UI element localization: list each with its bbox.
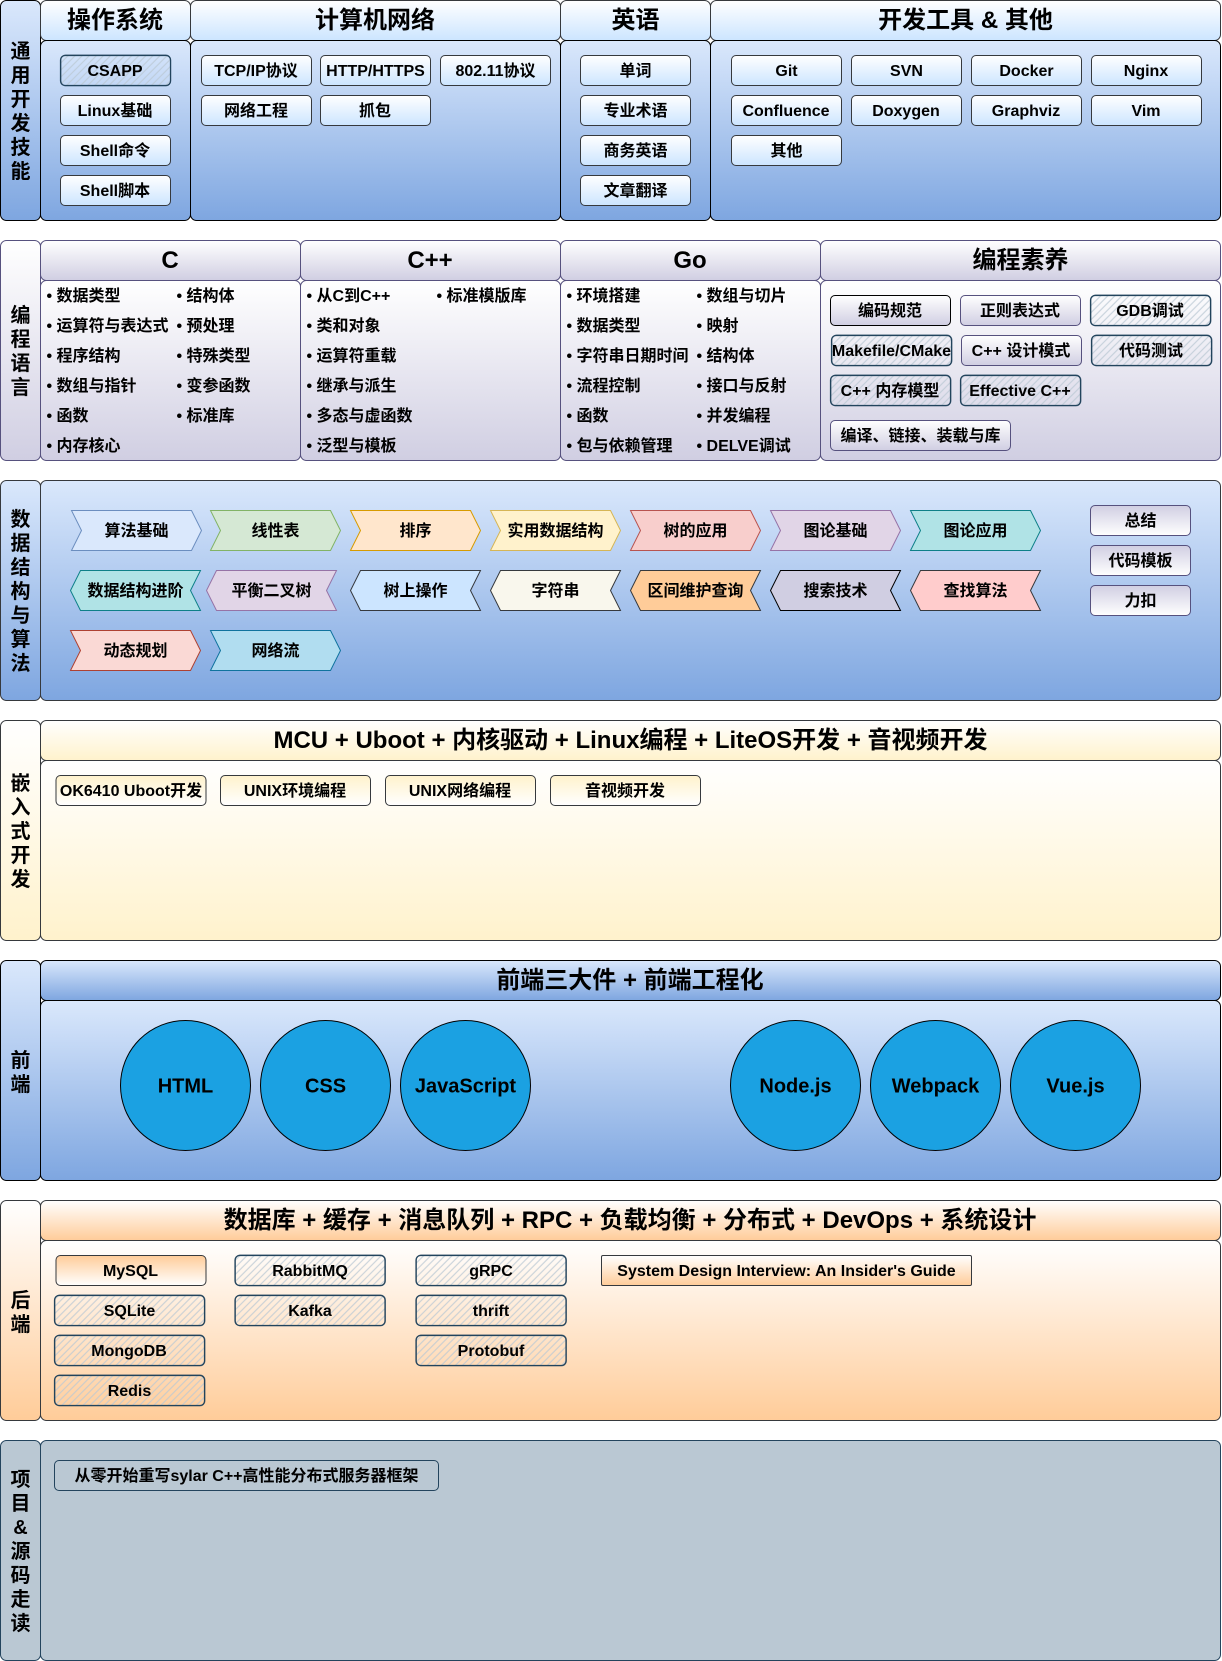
sidebar label: 数据结构与算法: 据 xyxy=(10,532,30,555)
button: Graphviz: Graphviz xyxy=(992,103,1060,120)
step: 图论应用 xyxy=(910,510,1040,550)
sketch button: CSAPP xyxy=(60,55,171,86)
sidebar label: 编程语言 xyxy=(0,240,40,460)
sidebar label: 项目&源码走读: 读 xyxy=(10,1612,30,1635)
step: 平衡二叉树: 平衡二叉树 xyxy=(231,581,312,600)
topic list: C++: • 类和对象 xyxy=(306,316,381,335)
button: System Design Interview xyxy=(602,1256,972,1286)
heading: backend: 数据库 + 缓存 + 消息队列 + RPC + 负载均衡 + 分布式 + DevOps + 系统设计 xyxy=(224,1207,1036,1234)
button: 抓包: 抓包 xyxy=(359,101,391,120)
topic list: C: • 标准库 xyxy=(176,407,235,425)
button: OK6410 Uboot开发 xyxy=(56,776,206,806)
step: 搜索技术 xyxy=(770,570,900,610)
button: 音视频开发 xyxy=(550,776,700,806)
sidebar label: 数据结构与算法: 算 xyxy=(10,628,30,651)
sketch button: SQLite xyxy=(54,1295,205,1326)
button: 单词 xyxy=(580,56,690,86)
topic list: Go: • DELVE调试 xyxy=(696,437,791,455)
panel: 编程素养: 编程素养 xyxy=(972,247,1068,274)
sidebar label: 后端: 后 xyxy=(10,1289,30,1312)
sketch button: Effective C++: Effective C++ xyxy=(969,383,1071,400)
sketch button: Makefile/CMake: Makefile/CMake xyxy=(832,343,951,360)
sketch button: Makefile/CMake xyxy=(832,335,952,366)
topic list: Go: • 包与依赖管理 xyxy=(566,436,673,455)
sidebar label: 前端: 前 xyxy=(10,1049,30,1072)
panel: 开发工具 & 其他 xyxy=(710,0,1220,220)
button: HTTP/HTTPS xyxy=(320,56,430,86)
sidebar label: 嵌入式开发: 开 xyxy=(10,845,30,867)
button: UNIX环境编程: UNIX环境编程 xyxy=(244,781,346,800)
sketch button: GDB调试: GDB调试 xyxy=(1116,302,1184,320)
sketch button: Effective C++ xyxy=(960,375,1081,406)
sidebar label: 前端 xyxy=(0,960,40,1180)
button: 力扣 xyxy=(1090,586,1190,616)
topic list: C++: • 从C到C++ xyxy=(306,287,390,305)
button: OK6410 Uboot开发: OK6410 Uboot开发 xyxy=(60,781,202,800)
button: 音视频开发: 音视频开发 xyxy=(585,781,665,800)
button: HTTP/HTTPS: HTTP/HTTPS xyxy=(326,63,425,80)
button: 代码模板 xyxy=(1090,546,1190,576)
button: 编译、链接、装载与库: 编译、链接、装载与库 xyxy=(840,426,1001,445)
sidebar label: 数据结构与算法: 法 xyxy=(10,652,30,675)
step: 数据结构进阶: 数据结构进阶 xyxy=(87,581,184,600)
topic list: C: • 结构体 xyxy=(176,287,235,305)
step: 线性表 xyxy=(210,510,340,550)
panel: Go: Go xyxy=(673,247,707,274)
button: Graphviz xyxy=(972,96,1082,126)
sketch button: SQLite: SQLite xyxy=(104,1303,155,1320)
sketch button: Kafka xyxy=(235,1295,385,1326)
circle: Node.js: Node.js xyxy=(759,1076,832,1098)
sidebar label: 后端 xyxy=(0,1200,40,1420)
circle: Vue.js xyxy=(1010,1020,1140,1150)
topic list: C: • 变参函数 xyxy=(176,376,251,395)
panel: C++ xyxy=(300,240,560,460)
button: sylar framework: 从零开始重写sylar C++高性能分布式服务器框架 xyxy=(74,1466,419,1485)
button: TCP/IP协议 xyxy=(202,56,312,86)
button: TCP/IP协议: TCP/IP协议 xyxy=(214,62,298,80)
sidebar label: 数据结构与算法: 构 xyxy=(10,580,30,603)
button: MySQL: MySQL xyxy=(103,1263,158,1280)
panel: 项目 content xyxy=(40,1440,1220,1660)
sketch button: MongoDB: MongoDB xyxy=(91,1343,167,1360)
section: 数据结构与算法 xyxy=(0,480,1220,700)
panel: 计算机网络: 计算机网络 xyxy=(315,6,435,34)
step: 算法基础 xyxy=(72,510,202,550)
sidebar label: 数据结构与算法: 数 xyxy=(10,508,30,531)
sidebar label: 通用开发技能: 能 xyxy=(10,160,30,183)
button: 商务英语 xyxy=(580,136,690,166)
button: 专业术语 xyxy=(580,96,690,126)
button: 802.11协议: 802.11协议 xyxy=(455,62,536,80)
button: 代码模板: 代码模板 xyxy=(1108,552,1173,570)
step: 数据结构进阶 xyxy=(70,570,200,610)
button: 其他 xyxy=(732,136,842,166)
button: 编码规范: 编码规范 xyxy=(858,301,922,320)
step: 查找算法 xyxy=(910,570,1040,610)
sketch button: 代码测试 xyxy=(1092,335,1212,366)
step: 图论应用: 图论应用 xyxy=(943,521,1008,540)
button: 总结 xyxy=(1090,506,1190,536)
step: 实用数据结构 xyxy=(490,510,620,550)
section: 嵌入式开发 xyxy=(0,720,1220,940)
topic list: C++: • 泛型与模板 xyxy=(306,437,397,455)
topic list: Go: • 字符串日期时间 xyxy=(566,346,689,365)
panel: 计算机网络 xyxy=(190,0,560,220)
button: Docker: Docker xyxy=(999,63,1054,80)
button: 正则表达式 xyxy=(960,296,1080,326)
sketch button: gRPC: gRPC xyxy=(469,1263,513,1280)
topic list: C: • 数组与指针 xyxy=(46,377,137,395)
sidebar label: 项目&源码走读: 走 xyxy=(10,1588,30,1611)
topic list: C: • 数据类型 xyxy=(46,287,121,305)
button: 802.11协议 xyxy=(440,56,550,86)
topic list: Go: • 函数 xyxy=(566,407,609,425)
button: 编码规范 xyxy=(830,296,950,326)
topic list: Go: • 接口与反射 xyxy=(696,377,787,395)
sidebar label: 嵌入式开发 xyxy=(0,720,40,940)
step: 算法基础: 算法基础 xyxy=(104,521,169,540)
step: 平衡二叉树 xyxy=(206,570,336,610)
step: 区间维护查询 xyxy=(630,570,760,610)
panel: 操作系统 xyxy=(40,0,190,220)
section: 后端 xyxy=(0,1200,1220,1420)
sketch button: GDB调试 xyxy=(1090,295,1211,326)
step: 网络流 xyxy=(210,630,340,670)
step: 图论基础 xyxy=(770,510,900,550)
sidebar label: 嵌入式开发: 式 xyxy=(10,820,30,843)
button: SVN: SVN xyxy=(890,63,923,80)
topic list: C++: • 多态与虚函数 xyxy=(306,406,413,425)
panel: 前端 content xyxy=(40,960,1220,1180)
button: 抓包 xyxy=(320,96,430,126)
step: 图论基础: 图论基础 xyxy=(803,521,868,540)
panel: 嵌入式 content xyxy=(40,720,1220,940)
sidebar label: 编程语言: 语 xyxy=(10,352,30,375)
section: 前端 xyxy=(0,960,1220,1180)
sketch button: thrift: thrift xyxy=(473,1303,510,1320)
sketch button: RabbitMQ: RabbitMQ xyxy=(272,1263,348,1280)
button: Doxygen xyxy=(852,96,962,126)
topic list: Go: • 映射 xyxy=(696,317,739,335)
sidebar label: 通用开发技能 xyxy=(0,0,40,220)
step: 树上操作: 树上操作 xyxy=(383,581,448,600)
button: Vim xyxy=(1092,96,1202,126)
step: 实用数据结构: 实用数据结构 xyxy=(507,521,604,540)
topic list: C: • 预处理 xyxy=(176,317,235,335)
step: 排序: 排序 xyxy=(399,521,432,540)
step: 查找算法: 查找算法 xyxy=(943,581,1008,600)
sidebar label: 项目&源码走读 xyxy=(0,1440,40,1660)
sketch button: Protobuf xyxy=(416,1335,566,1366)
button: System Design Interview: System Design Interview: An Insider's Guide xyxy=(617,1263,956,1280)
button: UNIX环境编程 xyxy=(220,776,370,806)
sketch button: thrift xyxy=(416,1295,566,1326)
step: 动态规划 xyxy=(70,630,200,670)
sidebar label: 数据结构与算法 xyxy=(0,480,40,700)
topic list: C: • 内存核心 xyxy=(46,436,121,455)
topic list: C: • 特殊类型 xyxy=(176,346,251,365)
topic list: Go: • 数组与切片 xyxy=(696,287,787,305)
button: Linux基础: Linux基础 xyxy=(78,102,152,120)
panel: C xyxy=(40,240,300,460)
sidebar label: 通用开发技能: 通 xyxy=(10,40,30,63)
sketch button: CSAPP: CSAPP xyxy=(87,63,143,80)
panel: C: C xyxy=(161,247,179,274)
sketch button: Protobuf: Protobuf xyxy=(458,1343,525,1360)
sidebar label: 嵌入式开发: 嵌 xyxy=(10,772,30,795)
heading: embedded stack: MCU + Uboot + 内核驱动 + Linux编程 + LiteOS开发 + 音视频开发 xyxy=(273,727,988,754)
circle: HTML: HTML xyxy=(158,1076,213,1098)
sidebar label: 通用开发技能: 发 xyxy=(10,112,30,135)
sketch button: RabbitMQ xyxy=(235,1255,385,1286)
circle: CSS xyxy=(260,1020,390,1150)
topic list: Go: • 结构体 xyxy=(696,347,755,365)
panel: 后端 content xyxy=(40,1200,1220,1420)
sidebar label: 项目&源码走读: 码 xyxy=(10,1564,30,1587)
topic list: C: • 运算符与表达式 xyxy=(46,316,169,335)
button: MySQL xyxy=(56,1256,206,1286)
button: 专业术语: 专业术语 xyxy=(603,102,668,120)
button: C++ 设计模式 xyxy=(962,336,1082,366)
step: 网络流: 网络流 xyxy=(251,641,300,660)
section: 项目&源码走读 xyxy=(0,1440,1220,1660)
button: Shell脚本: Shell脚本 xyxy=(80,182,150,200)
sidebar label: 前端: 端 xyxy=(10,1073,30,1096)
button: UNIX网络编程 xyxy=(386,776,536,806)
button: 商务英语: 商务英语 xyxy=(603,141,668,160)
sidebar label: 项目&源码走读: 源 xyxy=(10,1540,30,1563)
button: Linux基础 xyxy=(60,96,170,126)
button: Shell命令: Shell命令 xyxy=(80,141,150,160)
sketch button: Redis xyxy=(54,1375,205,1406)
button: 网络工程 xyxy=(202,96,312,126)
circle: JavaScript: JavaScript xyxy=(415,1076,516,1098)
sidebar label: 后端: 端 xyxy=(10,1313,30,1336)
sidebar label: 通用开发技能: 开 xyxy=(10,89,30,111)
sketch button: C++ 内存模型: C++ 内存模型 xyxy=(841,382,939,400)
sidebar label: 数据结构与算法: 结 xyxy=(10,556,30,579)
button: 文章翻译 xyxy=(580,176,690,206)
step: 字符串: 字符串 xyxy=(531,581,580,600)
circle: Node.js xyxy=(730,1020,860,1150)
section: 通用开发技能 xyxy=(0,0,1220,220)
sidebar label: 嵌入式开发: 入 xyxy=(10,796,30,819)
topic list: Go: • 数据类型 xyxy=(566,317,641,335)
button: 编译、链接、装载与库 xyxy=(830,420,1010,450)
step: 动态规划: 动态规划 xyxy=(103,641,168,660)
sidebar label: 数据结构与算法: 与 xyxy=(10,604,30,627)
circle: Vue.js: Vue.js xyxy=(1046,1076,1105,1098)
circle: HTML xyxy=(120,1020,250,1150)
sidebar label: 编程语言: 编 xyxy=(10,303,30,327)
sketch button: gRPC xyxy=(416,1255,566,1286)
panel: 开发工具 & 其他: 开发工具 & 其他 xyxy=(878,7,1053,34)
sidebar label: 项目&源码走读: & xyxy=(13,1517,28,1539)
button: Docker xyxy=(972,56,1082,86)
button: 总结: 总结 xyxy=(1124,511,1157,530)
sidebar label: 通用开发技能: 用 xyxy=(10,65,30,87)
step: 字符串 xyxy=(490,570,620,610)
sketch button: MongoDB xyxy=(54,1335,205,1366)
topic list: Go xyxy=(566,286,791,455)
step: 树的应用 xyxy=(630,510,760,550)
panel: C++: C++ xyxy=(407,247,453,274)
topic list: C++: • 标准模版库 xyxy=(436,287,527,305)
button: Doxygen: Doxygen xyxy=(872,103,940,120)
step: 线性表: 线性表 xyxy=(251,521,300,540)
button: Shell命令 xyxy=(60,136,170,166)
button: Nginx: Nginx xyxy=(1124,63,1168,80)
panel: 英语 xyxy=(560,0,710,220)
step: 树的应用: 树的应用 xyxy=(663,521,728,540)
step: 搜索技术: 搜索技术 xyxy=(803,581,868,600)
sidebar label: 编程语言: 言 xyxy=(10,376,30,399)
topic list: C xyxy=(46,287,251,455)
step: 树上操作 xyxy=(350,570,480,610)
step: 区间维护查询: 区间维护查询 xyxy=(647,581,744,600)
sidebar label: 项目&源码走读: 项 xyxy=(10,1469,30,1491)
panel: Go xyxy=(560,240,820,460)
button: Shell脚本 xyxy=(60,176,170,206)
button: 文章翻译: 文章翻译 xyxy=(603,181,668,200)
sketch button: Kafka: Kafka xyxy=(288,1303,332,1320)
button: 正则表达式: 正则表达式 xyxy=(980,302,1060,320)
button: Confluence: Confluence xyxy=(742,103,830,120)
topic list: Go: • 流程控制 xyxy=(566,376,641,395)
button: Git xyxy=(732,56,842,86)
button: C++ 设计模式: C++ 设计模式 xyxy=(972,342,1070,360)
sidebar label: 编程语言: 程 xyxy=(10,328,30,351)
button: SVN xyxy=(852,56,962,86)
section: 编程语言 xyxy=(0,240,1220,460)
button: 单词: 单词 xyxy=(619,62,652,80)
sketch button: Redis: Redis xyxy=(108,1383,151,1400)
circle: JavaScript xyxy=(400,1020,530,1150)
topic list: Go: • 并发编程 xyxy=(696,406,771,425)
button: UNIX网络编程: UNIX网络编程 xyxy=(409,781,511,800)
button: 力扣: 力扣 xyxy=(1124,591,1157,610)
circle: Webpack xyxy=(870,1020,1000,1150)
topic list: Go: • 环境搭建 xyxy=(566,286,641,305)
topic list: C++ xyxy=(306,287,527,455)
sidebar label: 项目&源码走读: 目 xyxy=(10,1493,30,1515)
topic list: C++: • 运算符重载 xyxy=(306,346,397,365)
sketch button: C++ 内存模型 xyxy=(830,375,951,406)
panel: 编程素养 xyxy=(820,240,1220,460)
button: Nginx xyxy=(1092,56,1202,86)
button: Vim: Vim xyxy=(1131,103,1161,120)
circle: Webpack: Webpack xyxy=(892,1076,980,1098)
sidebar label: 嵌入式开发: 发 xyxy=(10,868,30,891)
button: Git: Git xyxy=(775,63,798,80)
panel: algorithm topics xyxy=(40,480,1220,700)
button: 网络工程: 网络工程 xyxy=(224,101,288,120)
circle: CSS: CSS xyxy=(305,1076,346,1098)
topic list: C: • 函数 xyxy=(46,407,89,425)
sketch button: 代码测试: 代码测试 xyxy=(1119,342,1183,360)
sidebar label: 通用开发技能: 技 xyxy=(10,136,30,159)
button: sylar framework xyxy=(54,1460,438,1490)
button: Confluence xyxy=(732,96,842,126)
heading: frontend: 前端三大件 + 前端工程化 xyxy=(496,967,764,994)
topic list: C: • 程序结构 xyxy=(46,346,121,365)
step: 排序 xyxy=(350,510,480,550)
panel: 英语: 英语 xyxy=(612,7,660,34)
button: 其他: 其他 xyxy=(770,142,803,160)
panel: 操作系统: 操作系统 xyxy=(67,7,163,34)
topic list: C++: • 继承与派生 xyxy=(306,376,397,395)
